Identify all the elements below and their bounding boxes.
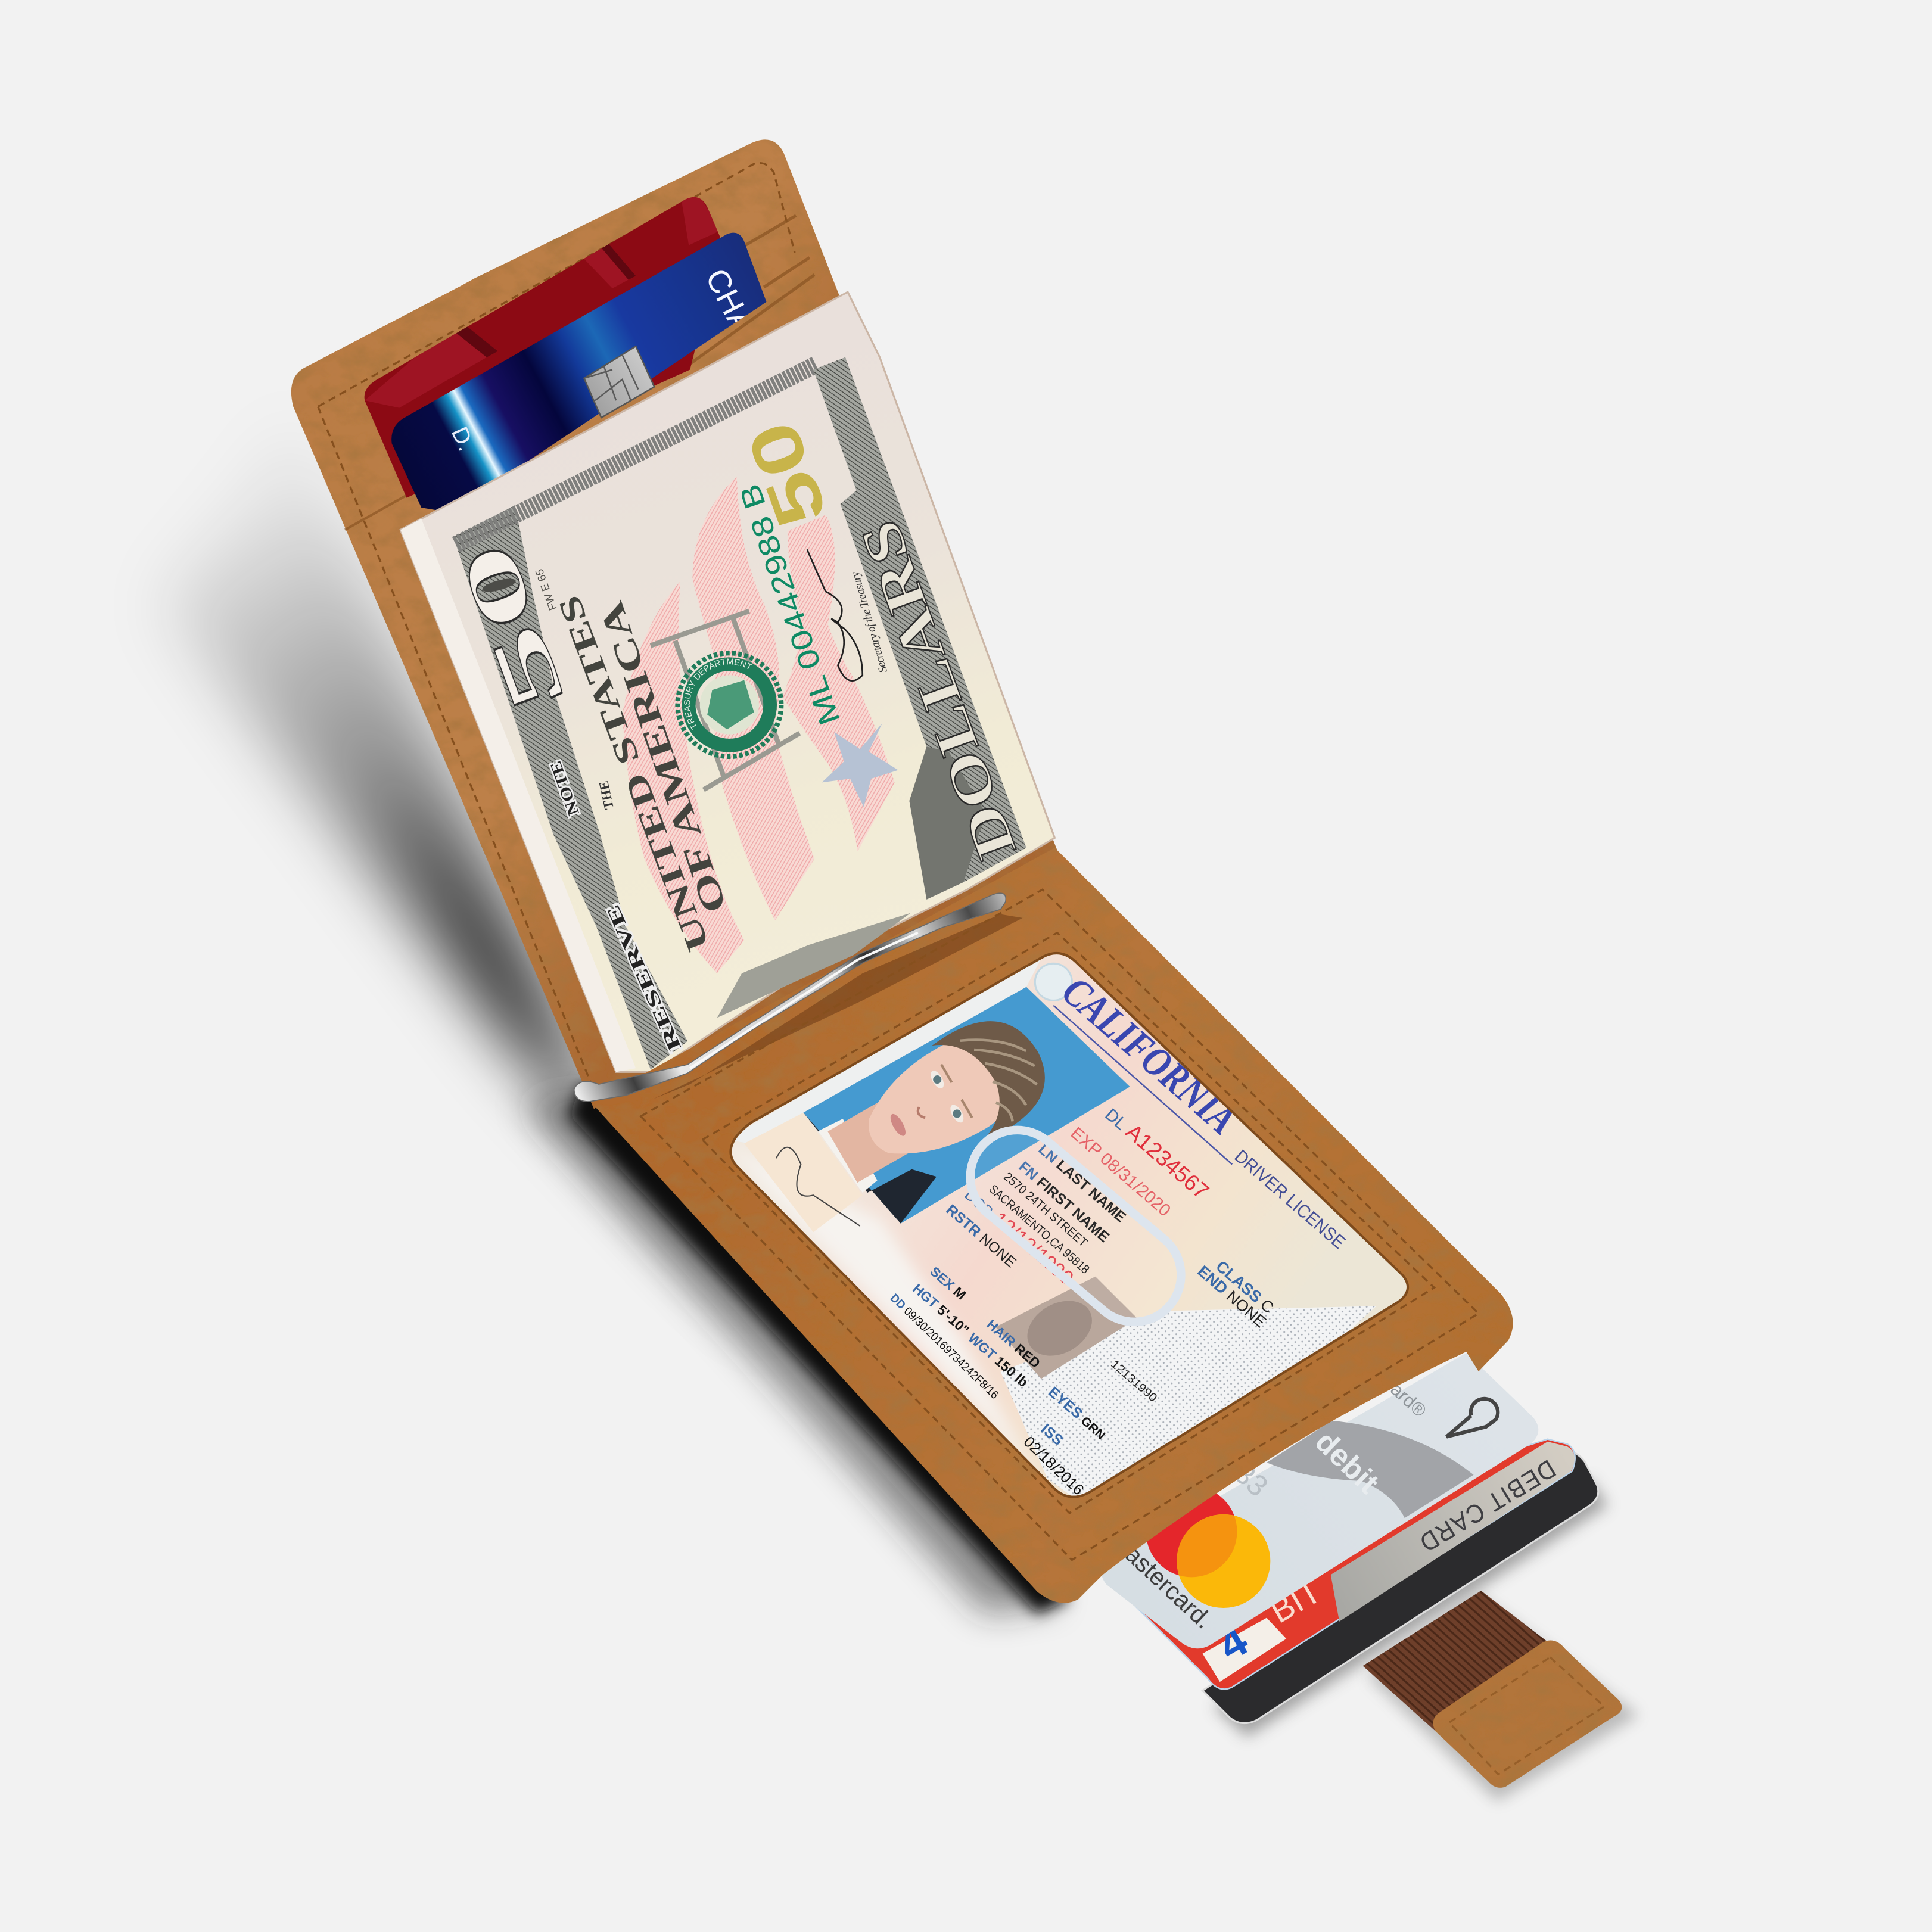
treasury seal: TREASURY DEPARTMENT — [684, 659, 753, 730]
right eye — [948, 1103, 966, 1125]
last name: LN LAST NAME — [1035, 1141, 1129, 1225]
lower panel stitching — [640, 889, 1479, 1560]
document id: DD 09/30/20169734242F8/16 — [888, 1292, 1001, 1402]
logo box — [1203, 1618, 1286, 1682]
weight: WGT 150 lb — [965, 1330, 1031, 1390]
bill fold edge — [400, 519, 636, 1072]
top scalloped border — [456, 365, 816, 545]
issue date: 02/18/2016 — [1020, 1433, 1087, 1498]
restrictions: RSTR NONE — [942, 1202, 1019, 1271]
california title: CALIFORNIA — [1053, 967, 1246, 1143]
signature — [807, 549, 863, 681]
mastercard overlap — [1177, 1514, 1237, 1578]
eyes: EYES GRN — [1045, 1384, 1109, 1443]
embossed digits: 33 — [1228, 1456, 1274, 1503]
portrait background — [803, 987, 1130, 1224]
face — [849, 1025, 1024, 1180]
left pale area — [727, 1146, 1047, 1497]
left engraved band — [453, 505, 687, 1069]
clear window tab loop — [951, 1111, 1200, 1341]
pink flag wave left — [622, 581, 744, 973]
grey swoosh — [1267, 1421, 1474, 1518]
hair highlights — [960, 1015, 1053, 1124]
bottom engraving wisps — [717, 913, 910, 1018]
nose — [916, 1107, 925, 1119]
corner 50: 50 — [443, 532, 581, 723]
wallet lower panel — [592, 848, 1513, 1603]
height: HGT 5'-10" — [910, 1281, 972, 1337]
title underline — [1053, 1006, 1232, 1164]
mastercard red circle — [1146, 1486, 1237, 1577]
secretary label: Secretary of the Treasury — [848, 570, 890, 674]
mastercard wordmark: mastercard. — [1105, 1526, 1218, 1634]
neck — [827, 1102, 909, 1183]
shirt collar — [818, 1119, 878, 1193]
mastercard yellow circle — [1177, 1514, 1270, 1608]
license base — [715, 937, 1429, 1516]
left eye — [928, 1069, 947, 1091]
hair — [926, 1000, 1064, 1144]
sex: SEX M — [927, 1264, 969, 1303]
card brand fragment: card® — [1380, 1373, 1430, 1421]
blue credit card — [391, 233, 766, 512]
brows — [941, 1065, 972, 1118]
wallet upper panel — [291, 139, 1057, 1109]
date of birth: DOB 12/12/1990 — [960, 1183, 1078, 1289]
license number: DL A1234567 — [1101, 1101, 1214, 1204]
silver mastercard debit card — [1102, 1353, 1538, 1648]
first name: FN FIRST NAME — [1015, 1159, 1112, 1246]
treasury star — [822, 723, 898, 807]
wallet cast shadow — [160, 419, 1639, 1802]
lower left slot edges — [345, 495, 407, 530]
cardholder letter: D. — [446, 423, 480, 455]
red card stripes — [365, 196, 721, 408]
large grey letter behind seal — [651, 611, 799, 790]
card slot edges — [689, 216, 814, 365]
state seal — [1035, 963, 1072, 1000]
note text: NOTE — [546, 759, 583, 818]
mouth — [888, 1112, 909, 1138]
black card — [1203, 1451, 1598, 1723]
logo digit: 4 — [1210, 1615, 1256, 1670]
clear window with driver license — [715, 937, 1429, 1516]
united states: UNITED STATES — [551, 590, 717, 956]
audit number: 12131990 — [1108, 1358, 1159, 1405]
folded 50 dollar bills — [399, 291, 1056, 1073]
of america: OF AMERICA — [592, 597, 735, 918]
red debit card — [1109, 1439, 1575, 1689]
class: CLASS C — [1212, 1257, 1277, 1317]
end: END NONE — [1194, 1262, 1270, 1331]
EMV chip — [584, 346, 654, 418]
bill paper — [400, 292, 1054, 1072]
expiry: EXP 08/31/2020 — [1067, 1124, 1174, 1221]
ghost portrait — [995, 1277, 1137, 1379]
window stitching — [702, 933, 1434, 1513]
signature area — [744, 1113, 863, 1232]
issuer name: CHA — [698, 263, 761, 340]
card label: debit card: DEBIT CARD — [1414, 1454, 1560, 1558]
card brand icon — [1446, 1399, 1498, 1437]
city line: SACRAMENTO,CA 95818 — [986, 1182, 1092, 1277]
window rim — [732, 954, 1407, 1496]
pull strap: leather tab — [1433, 1641, 1622, 1788]
corner 50 oval — [481, 576, 517, 595]
suit — [803, 1113, 937, 1224]
signature — [776, 1147, 860, 1226]
capitol landscape — [909, 746, 986, 900]
pink flag wave right — [782, 515, 895, 851]
red card — [365, 196, 722, 498]
gold 50: 50 — [732, 411, 842, 537]
hair: HAIR RED — [984, 1317, 1043, 1371]
lower dotted area — [1000, 1306, 1376, 1501]
stitching — [318, 163, 795, 1084]
reserve text: RESERVE — [602, 901, 685, 1054]
dollars: DOLLARS — [848, 512, 1028, 867]
pull strap: elastic — [1362, 1591, 1550, 1731]
issue label: ISS — [1038, 1421, 1066, 1449]
debit label: debit — [1309, 1424, 1386, 1500]
head — [816, 1000, 1064, 1208]
clip pocket shadow — [653, 914, 1023, 1099]
small plate code: FW E 65 — [533, 567, 559, 612]
treasury seal — [675, 651, 784, 759]
serial number: ML 00442988 B — [733, 480, 847, 730]
money clip — [574, 893, 1006, 1102]
portrait — [803, 1000, 1064, 1224]
street address: 2570 24TH STREET — [1001, 1170, 1090, 1250]
grey card band — [1331, 1442, 1575, 1622]
the: THE — [596, 780, 617, 811]
right engraved band — [813, 357, 1026, 882]
driver license label: DRIVER LICENSE — [1231, 1146, 1349, 1253]
pink flag wave middle — [692, 477, 814, 920]
top left guilloche band — [727, 951, 1045, 1146]
card label: debit fragment: BIT — [1264, 1572, 1327, 1630]
